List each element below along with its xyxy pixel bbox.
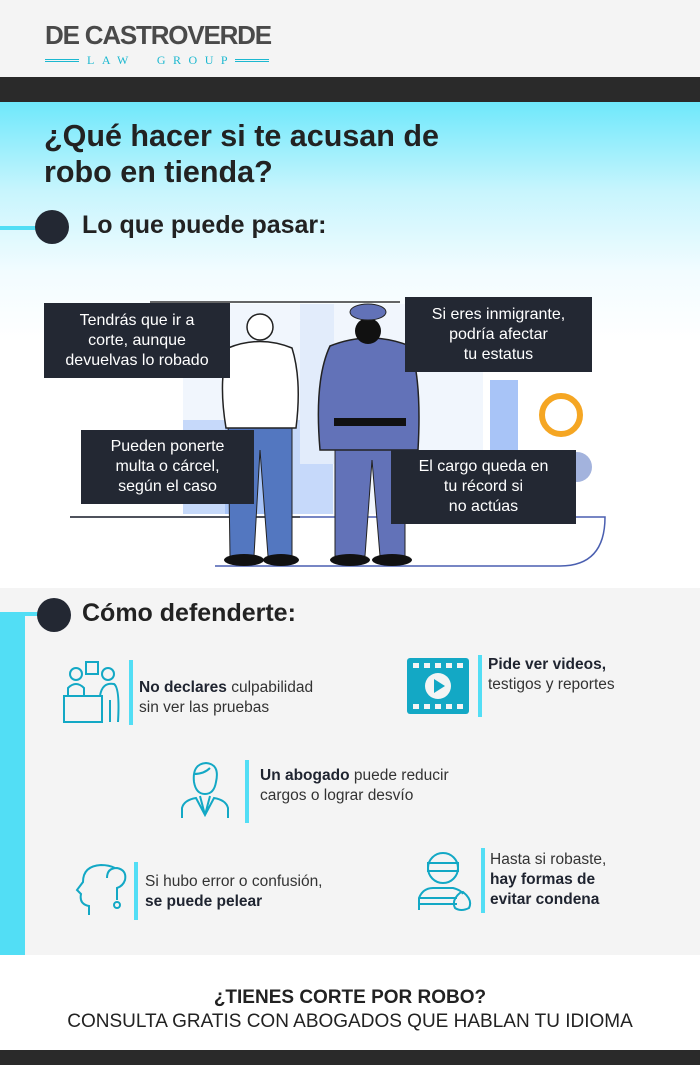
callout 1: devuelvas lo robado (65, 352, 209, 368)
callout 1: Tendrás que ir a (80, 312, 194, 328)
heading: Lo que puede pasar: Lo que puede pasar: (82, 211, 326, 239)
callout 3: multa o cárcel, (115, 458, 220, 475)
item 4: Si hubo error o confusión, (145, 873, 322, 890)
icon: thief (418, 852, 472, 911)
item 1: sin ver las pruebas (139, 699, 269, 716)
logo: LAW GROUP (87, 53, 235, 67)
section 2 background (0, 588, 700, 955)
header (0, 0, 700, 77)
item 2: testigos y reportes (488, 676, 615, 693)
CTA (67, 987, 633, 1032)
heading: Cómo defenderte: Cómo defenderte: (82, 599, 296, 627)
callout 2: Si eres inmigrante, (432, 306, 565, 322)
item 5 (418, 848, 606, 913)
item 4: se puede pelear (145, 893, 262, 910)
item 5: hay formas de (490, 871, 595, 888)
item 1: No declares culpabilidad (139, 679, 313, 696)
item 5: evitar condena (490, 891, 599, 908)
callout 2 (405, 297, 592, 372)
callout 1: corte, aunque (88, 332, 186, 348)
callout 3: según el caso (118, 478, 217, 495)
section 1 background (0, 102, 700, 588)
callout 2: podría afectar (449, 326, 548, 342)
callout 2: tu estatus (464, 346, 533, 362)
icon: lawyer (181, 762, 229, 818)
title: ¿Qué hacer si te acusan de robo en tienda? (44, 119, 439, 189)
heading: Lo que puede pasar (35, 210, 326, 244)
callout 4: tu récord si (444, 478, 523, 495)
item 4 (76, 862, 322, 920)
callout 4: El cargo queda en (419, 458, 548, 475)
logo (45, 20, 272, 67)
callout 4: no actúas (449, 498, 518, 515)
heading: Cómo defenderte (37, 598, 296, 632)
callout 3: Pueden ponerte (111, 438, 224, 455)
icon: head question (76, 864, 126, 915)
callout 4 (391, 450, 576, 524)
item 3 (181, 760, 449, 823)
item 2: Pide ver videos, (488, 656, 606, 673)
icon: video (407, 658, 469, 714)
item 5: Hasta si robaste, (490, 851, 606, 868)
item 2 (407, 655, 615, 717)
item 1 (63, 660, 313, 725)
icon: interview desk (63, 661, 120, 723)
officer (335, 425, 405, 556)
callout 3 (81, 430, 254, 504)
man (228, 418, 292, 556)
CTA: CONSULTA GRATIS CON ABOGADOS QUE HABLAN TU IDIOMA (67, 1011, 633, 1032)
item 3: Un abogado puede reducir cargos o lograr desvío (260, 767, 449, 804)
illustration (70, 301, 606, 567)
callout 1 (44, 303, 230, 378)
CTA: ¿TIENES CORTE POR ROBO? (214, 987, 486, 1008)
logo: DE CASTROVERDE (45, 20, 271, 50)
